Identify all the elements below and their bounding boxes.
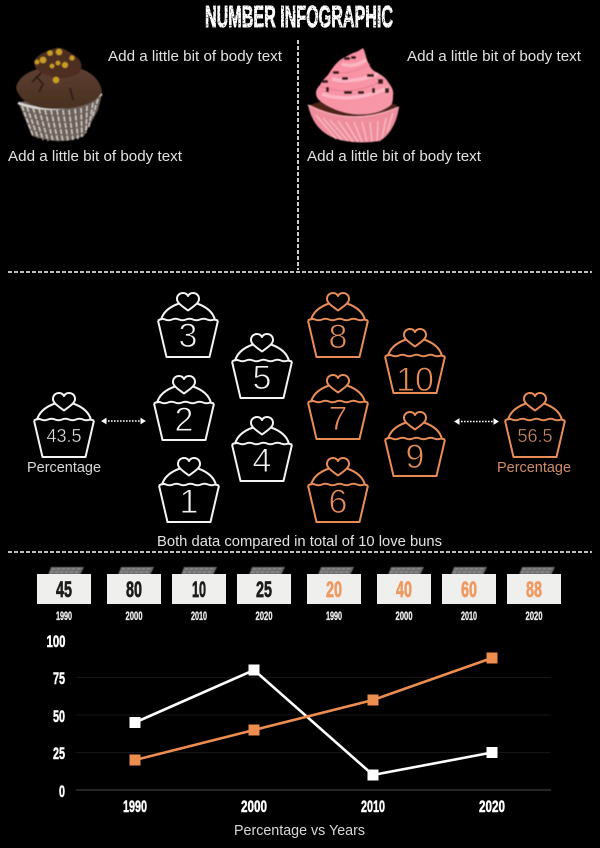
panel: chocolate muffin bbox=[8, 48, 282, 165]
cupcake 3: 3 bbox=[179, 317, 197, 355]
y axis labels: 0 bbox=[59, 782, 65, 801]
cupcake 4 bbox=[232, 417, 292, 481]
y axis labels: 100 bbox=[46, 632, 66, 651]
card: 40 in 2000 bbox=[377, 567, 431, 623]
cupcake 8 bbox=[308, 293, 368, 357]
card: 40 in 2000: 40 bbox=[396, 577, 412, 602]
cupcake 4: 4 bbox=[253, 442, 271, 480]
line chart: percentage vs years bbox=[46, 632, 551, 839]
cupcake 9: 9 bbox=[406, 438, 424, 476]
card: 45 in 1990 bbox=[37, 567, 91, 623]
cupcake 6 bbox=[308, 458, 368, 522]
card: 40 in 2000: 2000 bbox=[396, 609, 413, 623]
label: left percentage: Percentage bbox=[27, 460, 101, 476]
cupcake 5 bbox=[232, 334, 292, 398]
panel: love buns comparison bbox=[27, 293, 571, 550]
body text: cupcake right: Add a little bit of body text bbox=[407, 49, 581, 65]
card: 88 in 2020 bbox=[507, 567, 561, 623]
cupcake 2 bbox=[154, 376, 214, 440]
cupcake 56.5: 56.5 bbox=[517, 426, 553, 446]
card: 60 in 2010 bbox=[442, 567, 496, 623]
cupcake 6: 6 bbox=[329, 483, 347, 521]
icon group: white cupcakes bbox=[34, 293, 292, 522]
card: 80 in 2000: 80 bbox=[126, 577, 142, 602]
photo: chocolate muffin bbox=[16, 48, 102, 142]
x axis labels: 2000 bbox=[241, 797, 267, 816]
card: 25 in 2020: 25 bbox=[256, 577, 272, 602]
cupcake 8: 8 bbox=[329, 318, 347, 356]
card: 20 in 1990 bbox=[307, 567, 361, 623]
cupcake 5: 5 bbox=[253, 359, 271, 397]
card: 10 in 2010: 10 bbox=[192, 577, 206, 602]
chart caption: Percentage vs Years bbox=[234, 823, 365, 839]
y axis labels: 75 bbox=[53, 669, 65, 688]
y axis labels: 25 bbox=[53, 744, 65, 763]
cupcake 10 bbox=[385, 329, 445, 399]
cupcake 7: 7 bbox=[329, 400, 347, 438]
card: 88 in 2020: 2020 bbox=[526, 609, 543, 623]
card: 80 in 2000: 2000 bbox=[126, 609, 143, 623]
card: 25 in 2020: 2020 bbox=[256, 609, 273, 623]
card: 10 in 2010 bbox=[172, 567, 226, 623]
card: 20 in 1990: 20 bbox=[326, 577, 342, 602]
card: 88 in 2020: 88 bbox=[526, 577, 542, 602]
caption: both data compared: Both data compared in total of 10 love buns bbox=[157, 534, 442, 550]
axis line bbox=[76, 789, 551, 791]
x axis labels: 1990 bbox=[123, 797, 147, 816]
cupcake 1: 1 bbox=[180, 483, 198, 521]
x axis labels: 2020 bbox=[479, 797, 505, 816]
cupcake 43.5 bbox=[34, 393, 94, 457]
cupcake 56.5 bbox=[505, 393, 565, 457]
card: 45 in 1990: 1990 bbox=[56, 609, 72, 623]
x axis labels bbox=[123, 797, 505, 816]
body text: muffin right: Add a little bit of body text bbox=[108, 49, 282, 65]
y axis labels bbox=[46, 632, 66, 801]
series: white line bbox=[130, 664, 498, 780]
cupcake 2: 2 bbox=[175, 401, 193, 439]
card: 80 in 2000 bbox=[107, 567, 161, 623]
body text: muffin below: Add a little bit of body text bbox=[8, 149, 182, 165]
cupcake 10: 10 bbox=[396, 361, 434, 399]
photo: pink cupcake bbox=[308, 48, 399, 142]
cupcake 3 bbox=[158, 293, 218, 357]
cupcake 1 bbox=[159, 458, 219, 522]
card: 60 in 2010: 2010 bbox=[461, 609, 477, 623]
card: 20 in 1990: 1990 bbox=[326, 609, 342, 623]
series: orange line bbox=[130, 652, 498, 766]
label: right percentage: Percentage bbox=[497, 460, 571, 476]
card: 10 in 2010: 2010 bbox=[191, 609, 207, 623]
card: 60 in 2010: 60 bbox=[461, 577, 477, 602]
cupcake 43.5: 43.5 bbox=[46, 426, 82, 446]
cupcake 7 bbox=[308, 375, 368, 439]
icon group: orange cupcakes bbox=[308, 293, 565, 522]
title: NUMBER INFOGRAPHIC bbox=[205, 0, 393, 34]
card: 25 in 2020 bbox=[237, 567, 291, 623]
body text: cupcake below: Add a little bit of body text bbox=[307, 149, 481, 165]
arrow: right double-headed bbox=[455, 419, 498, 424]
arrow: left double-headed bbox=[102, 418, 145, 424]
panel: pink cupcake bbox=[307, 48, 581, 165]
y axis labels: 50 bbox=[53, 707, 65, 726]
card: 45 in 1990: 45 bbox=[56, 577, 72, 602]
cupcake 9 bbox=[385, 412, 445, 476]
x axis labels: 2010 bbox=[361, 797, 385, 816]
panel: taped value cards bbox=[37, 567, 561, 623]
